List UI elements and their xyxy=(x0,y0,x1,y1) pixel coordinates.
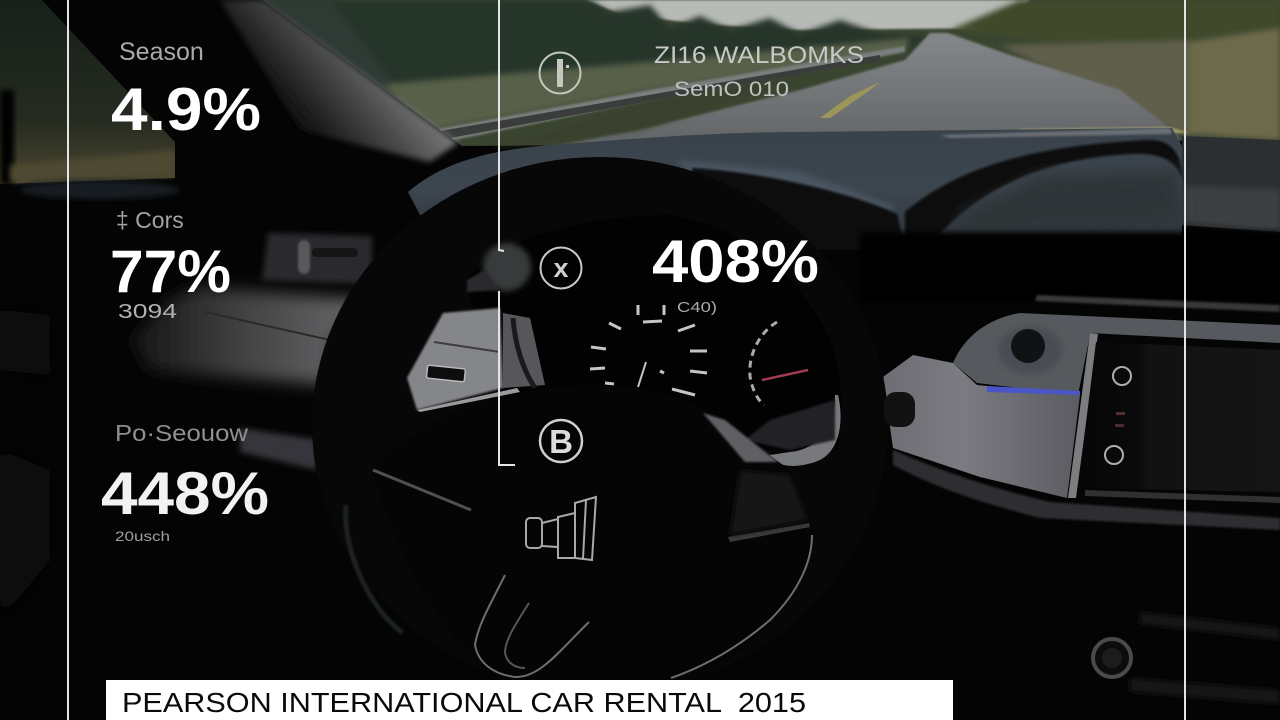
dash top xyxy=(408,128,1182,250)
wheel hub xyxy=(372,385,815,680)
tree line xyxy=(262,0,930,100)
road xyxy=(560,33,1180,145)
screen buttons xyxy=(1113,367,1131,385)
gauge cluster recess xyxy=(467,215,841,450)
stat: center: 408% xyxy=(652,228,819,295)
stat: center: C40) xyxy=(677,299,717,316)
steering wheel xyxy=(312,157,915,693)
icon: circle one xyxy=(540,52,580,94)
title bar xyxy=(106,680,953,720)
stat: position: 20usch xyxy=(115,528,170,544)
stat: position: 448% xyxy=(101,460,269,527)
dash trim strip xyxy=(1035,295,1280,312)
wheel ring xyxy=(312,157,888,693)
a-pillar xyxy=(42,0,462,210)
right spoke trim xyxy=(770,395,841,466)
icon: hub emblem xyxy=(526,497,596,560)
side window xyxy=(0,0,175,184)
heading: road text xyxy=(654,42,864,101)
brow arch xyxy=(905,140,1182,250)
icon: circle tools xyxy=(540,248,582,288)
hazard knob xyxy=(1011,329,1045,363)
dark mid dash xyxy=(860,232,1280,302)
icon: circle tools: x xyxy=(553,253,569,283)
tachometer gauge xyxy=(590,305,707,395)
wheel contour lines xyxy=(346,505,812,678)
stat: position: Po·Seouow xyxy=(115,420,248,446)
lower console band xyxy=(893,450,1280,530)
silver console panel xyxy=(883,355,1080,498)
heading: road text: SemO 010 xyxy=(674,78,789,101)
stat: season: Season xyxy=(119,38,204,66)
stat: season xyxy=(111,38,261,143)
stat: season: 4.9% xyxy=(111,76,261,143)
vent xyxy=(426,365,466,382)
binnacle hood xyxy=(692,168,905,250)
stat: cors xyxy=(110,207,231,323)
right side dash xyxy=(1182,136,1280,232)
right hill xyxy=(950,0,1280,46)
stat: center xyxy=(652,228,819,316)
icon: circle B: B xyxy=(549,423,573,460)
title bar: PEARSON INTERNATIONAL CAR RENTAL 2015 xyxy=(122,687,806,718)
left stalk panel xyxy=(262,233,372,284)
stat: cors: 3094 xyxy=(118,301,177,323)
left trim panels xyxy=(130,287,365,385)
sky xyxy=(585,0,1030,30)
speedometer gauge xyxy=(750,322,808,405)
lower console controls xyxy=(1093,639,1131,677)
stat: cors: ‡ Cors xyxy=(116,207,184,233)
hub highlight wedge xyxy=(703,413,778,462)
screen bezel xyxy=(1068,333,1280,520)
blue light xyxy=(987,386,1080,395)
heading: road text: ZI16 WALBOMKS xyxy=(654,42,864,69)
stat: cors: 77% xyxy=(110,238,231,305)
windshield base xyxy=(262,0,1280,146)
left inner opening xyxy=(407,308,503,410)
grass verge xyxy=(385,38,910,130)
upper console lobe xyxy=(953,313,1280,395)
column ball xyxy=(483,243,531,291)
stat: position xyxy=(101,420,269,544)
guardrail xyxy=(432,46,905,143)
icon: circle B xyxy=(540,420,582,462)
stalk xyxy=(884,392,915,427)
